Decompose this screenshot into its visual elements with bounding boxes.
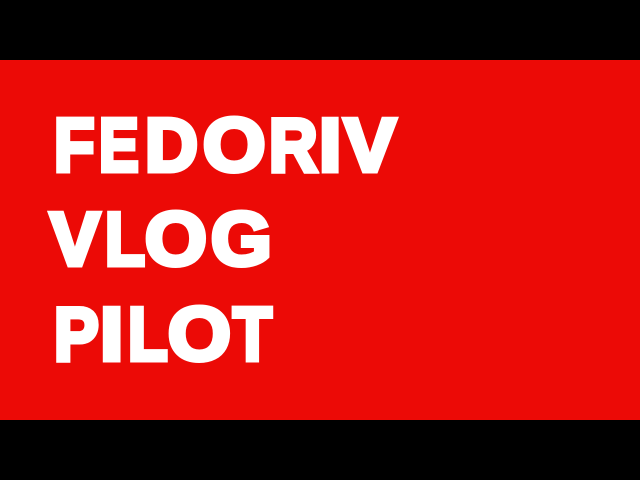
title line: FEDORIV: O: [203, 103, 265, 187]
title line: PILOT: [54, 292, 274, 376]
title line: PILOT: L: [128, 292, 167, 376]
title line: PILOT: T: [233, 292, 271, 376]
title line: FEDORIV: E: [99, 103, 138, 187]
title line: VLOG: L: [104, 197, 144, 281]
title line: FEDORIV: I: [319, 103, 341, 187]
red panel: [0, 60, 640, 420]
title line: VLOG: [47, 197, 272, 281]
title line: FEDORIV: R: [269, 103, 318, 187]
title line: PILOT: P: [54, 292, 98, 376]
title line: PILOT: O: [168, 292, 230, 376]
title line: FEDORIV: V: [344, 103, 396, 187]
title: [47, 103, 399, 376]
title line: FEDORIV: F: [54, 103, 94, 187]
title line: FEDORIV: [54, 103, 399, 187]
title line: VLOG: O: [145, 197, 207, 281]
title line: PILOT: I: [100, 292, 124, 376]
title line: VLOG: V: [50, 197, 100, 281]
title line: VLOG: G: [211, 197, 272, 281]
title line: FEDORIV: D: [145, 103, 198, 187]
